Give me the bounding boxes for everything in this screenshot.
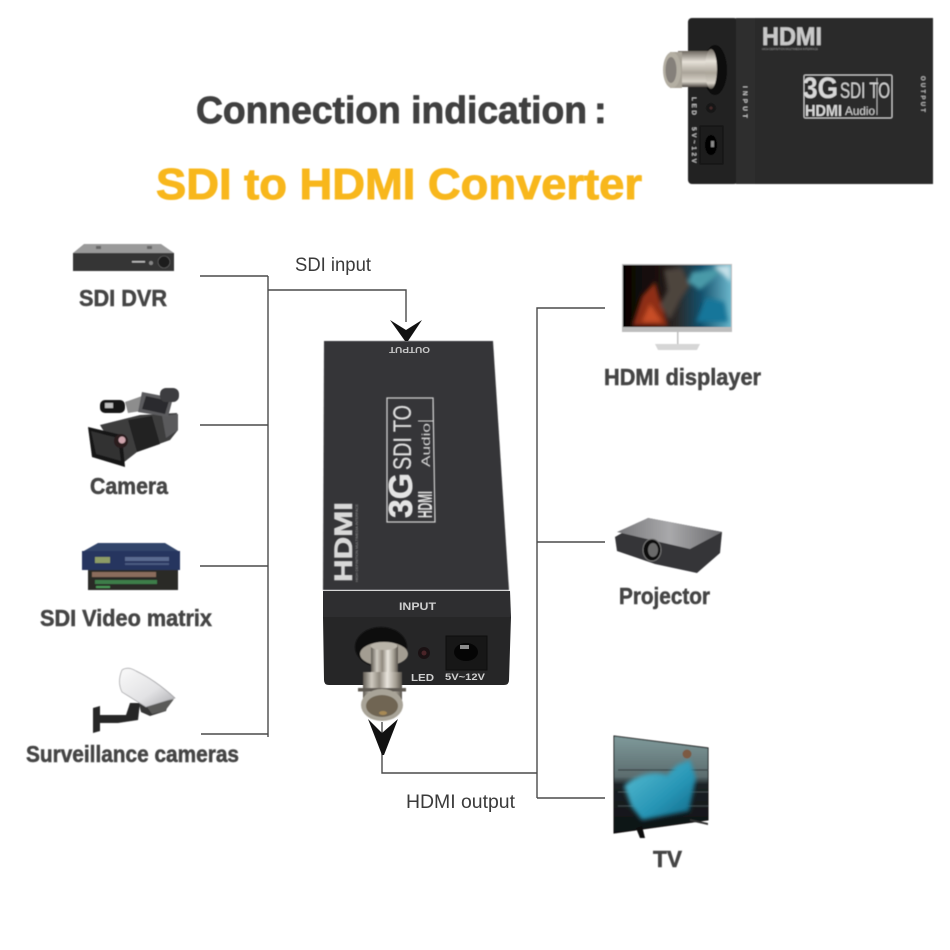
subtitle: SDI to HDMI Converter: SDI to HDMI Converter [156, 160, 642, 209]
product photo: converter top right: Audio [845, 104, 875, 118]
product photo: converter top right: LED [690, 97, 697, 115]
label: OUTPUT: OUTPUT [388, 345, 430, 355]
label: TV: TV [653, 846, 683, 872]
product photo: converter top right: HDMI [762, 23, 822, 51]
device logo: HDMI: HDMI [330, 502, 358, 582]
product photo: converter top right: OUTPUT [919, 76, 925, 112]
label: INPUT: INPUT [399, 601, 436, 613]
device logo: 3G SDI TO HDMI Audio: 3G [382, 473, 419, 518]
icon: camera [88, 388, 179, 467]
label: Surveillance cameras: Surveillance cameras [26, 741, 239, 767]
icon: SDI DVR [73, 244, 174, 271]
icon: TV [614, 736, 708, 838]
device logo: 3G SDI TO HDMI Audio: Audio [419, 423, 433, 467]
title: Connection indication: : [594, 90, 607, 132]
label: SDI DVR: SDI DVR [79, 285, 167, 311]
product photo: converter top right: 5V~12V [690, 127, 697, 164]
LED [418, 647, 430, 659]
label: SDI Video matrix: SDI Video matrix [40, 605, 212, 631]
device logo: HDMI: HIGH DEFINITION MULTIMEDIA INTERFACE [355, 503, 359, 582]
label: HDMI displayer: HDMI displayer [604, 364, 761, 390]
title: Connection indication: Connection indication [196, 90, 587, 132]
device body top face [323, 341, 509, 590]
product photo: converter top right: 3G [803, 72, 838, 105]
central device [323, 341, 511, 721]
device front face [323, 617, 511, 685]
icon: SDI video matrix [82, 543, 180, 590]
label: HDMI output: HDMI output [406, 792, 516, 813]
device logo: 3G SDI TO HDMI Audio: SDI TO [389, 405, 417, 470]
label: Camera: Camera [90, 473, 168, 499]
device input band [323, 591, 511, 617]
device logo: 3G SDI TO HDMI Audio [382, 398, 437, 522]
product photo: converter top right: HDMI [805, 103, 842, 120]
label: 5V~12V: 5V~12V [445, 672, 486, 683]
connector lines [200, 276, 605, 798]
product photo: converter top right: SDI TO [840, 78, 890, 103]
arrow: SDI input into device [390, 320, 422, 341]
icon: HDMI displayer [622, 264, 732, 350]
product photo: converter top right [663, 18, 933, 184]
label: Projector: Projector [619, 583, 710, 609]
label: SDI input: SDI input [295, 255, 372, 276]
icon: surveillance camera [93, 668, 175, 733]
device logo: 3G SDI TO HDMI Audio: HDMI [415, 491, 437, 518]
icon: projector [615, 518, 722, 573]
label: LED: LED [411, 673, 434, 684]
power jack [446, 636, 487, 670]
product photo: converter top right: INPUT [741, 86, 748, 118]
product photo: converter top right: HIGH DEFINITION MULTIMEDIA INTERFACE [762, 47, 818, 51]
BNC connector [355, 627, 408, 721]
arrow: HDMI output from connector [368, 719, 398, 755]
